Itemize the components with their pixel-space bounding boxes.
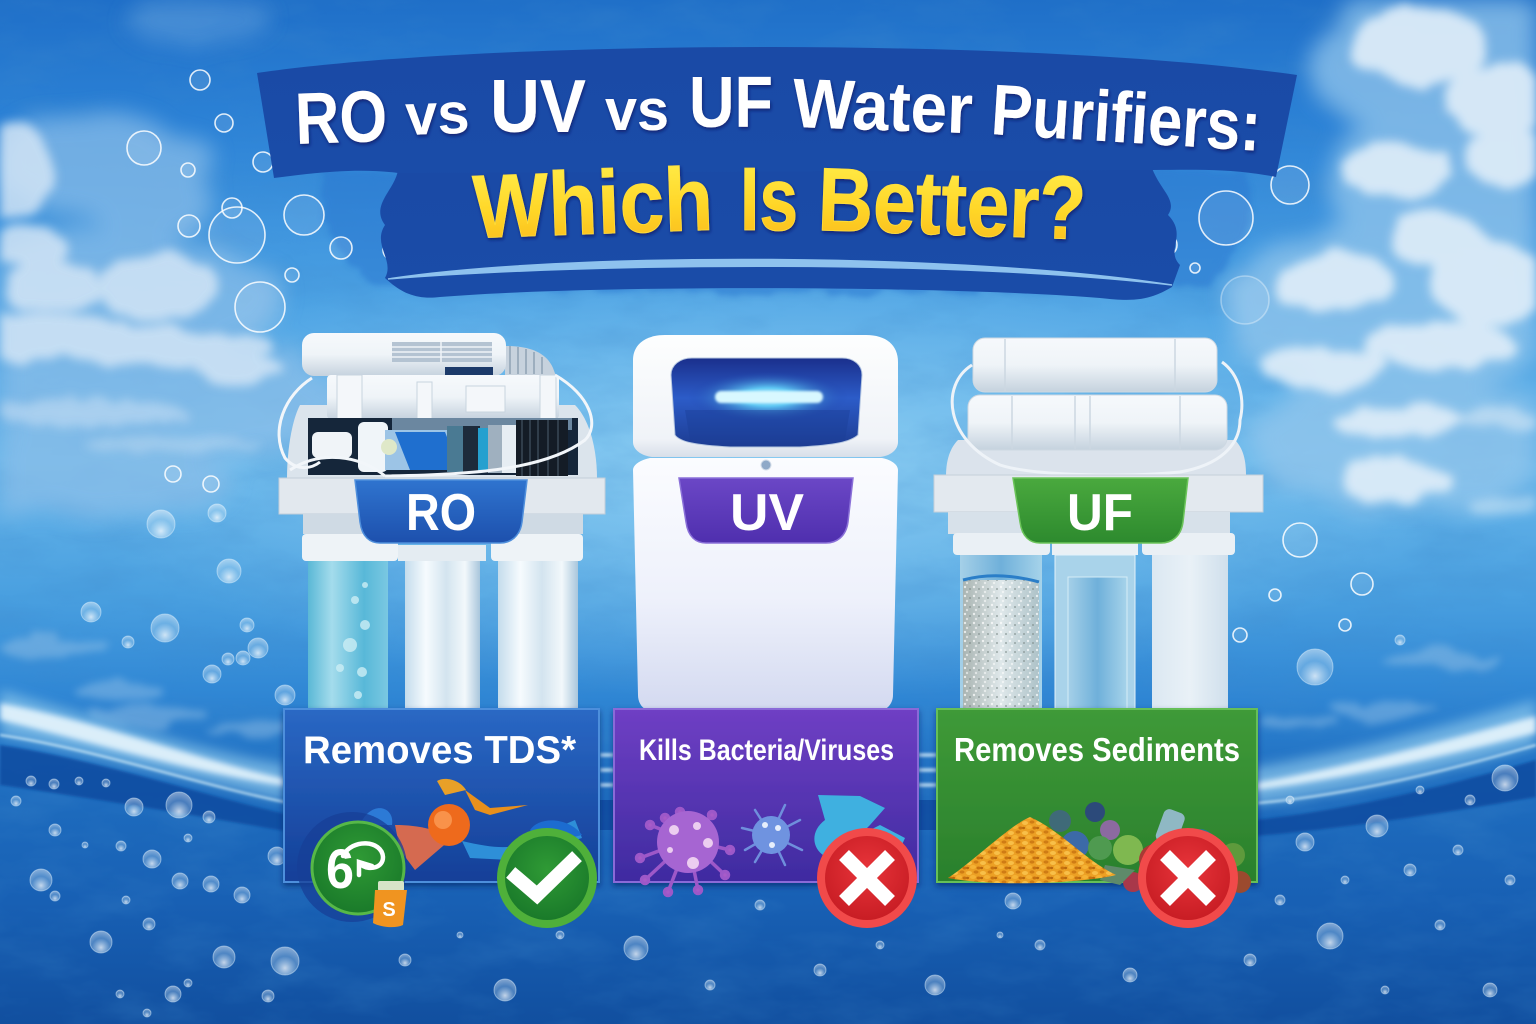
RO shelf — [279, 478, 605, 514]
icon: orange canister: S — [382, 899, 396, 921]
UF frame — [946, 440, 1246, 476]
RO label badge — [355, 480, 527, 543]
banner halo — [321, 170, 1251, 293]
title line 1 — [294, 63, 1263, 167]
icon: orange canister — [373, 881, 407, 927]
UF top cartridge — [973, 338, 1217, 392]
water waves — [0, 639, 1536, 836]
clouds left — [0, 0, 350, 515]
RO cartridge caps — [302, 514, 583, 561]
stones — [1049, 802, 1251, 893]
UF purifier — [934, 338, 1263, 710]
RO tubes — [279, 375, 592, 476]
RO purifier — [279, 333, 605, 711]
UF under shelf — [948, 512, 1230, 534]
title line 1: UF — [689, 63, 773, 143]
UF left cartridge — [960, 555, 1042, 710]
UV purifier — [633, 335, 898, 712]
RO right cartridge — [498, 561, 578, 711]
UV body — [633, 458, 898, 712]
RO left cartridge — [308, 561, 388, 711]
title line 1: Water — [791, 64, 974, 148]
UF shelf — [934, 475, 1263, 512]
panel: RO removes TDS — [284, 709, 599, 928]
icon: blue spray device — [814, 795, 905, 860]
icon: red cross — [1138, 828, 1238, 928]
panel: UV kills bacteria — [614, 709, 918, 928]
water droplets — [11, 504, 1518, 1017]
RO middle cartridge — [405, 561, 480, 711]
RO frame — [287, 405, 597, 478]
title line 2 — [471, 150, 1088, 259]
title line 1: Purifiers: — [989, 70, 1263, 167]
UF second cartridge — [968, 395, 1227, 450]
RO panel heading: Removes TDS* — [303, 729, 577, 772]
clouds right — [1220, 0, 1536, 515]
sediment pile — [948, 817, 1116, 883]
UV label badge: UV — [730, 484, 804, 542]
title line 1: RO — [294, 76, 389, 160]
icon: red cross — [817, 828, 917, 928]
icon: green circle with arrow — [297, 812, 407, 922]
title line 2: Better? — [816, 150, 1088, 259]
icon: green check — [497, 828, 597, 928]
UF tubes — [952, 362, 1242, 475]
panel: UF removes sediments — [937, 709, 1257, 928]
title line 2: Is — [740, 150, 798, 250]
UF label badge: UF — [1067, 484, 1133, 542]
RO top cartridge — [302, 333, 556, 376]
RO internal parts — [308, 418, 578, 476]
UV indicator — [761, 460, 771, 470]
contaminant splash illustration — [360, 779, 582, 870]
UV window — [671, 358, 862, 447]
sky bubbles — [127, 70, 1373, 642]
UF middle cartridge — [1055, 555, 1135, 710]
UF right cartridge — [1152, 555, 1228, 710]
UF cartridge caps — [953, 533, 1235, 555]
UV panel heading: Kills Bacteria/Viruses — [639, 734, 894, 767]
RO second cartridge — [327, 375, 559, 419]
title line 1: UV — [490, 64, 586, 148]
title line 1: vs — [404, 81, 470, 148]
RO label badge: RO — [406, 484, 476, 542]
icon: green circle with arrow: 6 — [326, 837, 354, 900]
UF label badge — [1013, 478, 1188, 543]
UF panel heading: Removes Sediments — [954, 731, 1240, 768]
icon: large virus — [636, 808, 734, 896]
title banner — [257, 47, 1297, 300]
title line 1: vs — [605, 78, 669, 143]
icon: small virus — [742, 805, 802, 865]
UV top housing — [633, 335, 898, 457]
title line 2: Which — [471, 150, 715, 258]
UV label badge — [679, 478, 853, 543]
